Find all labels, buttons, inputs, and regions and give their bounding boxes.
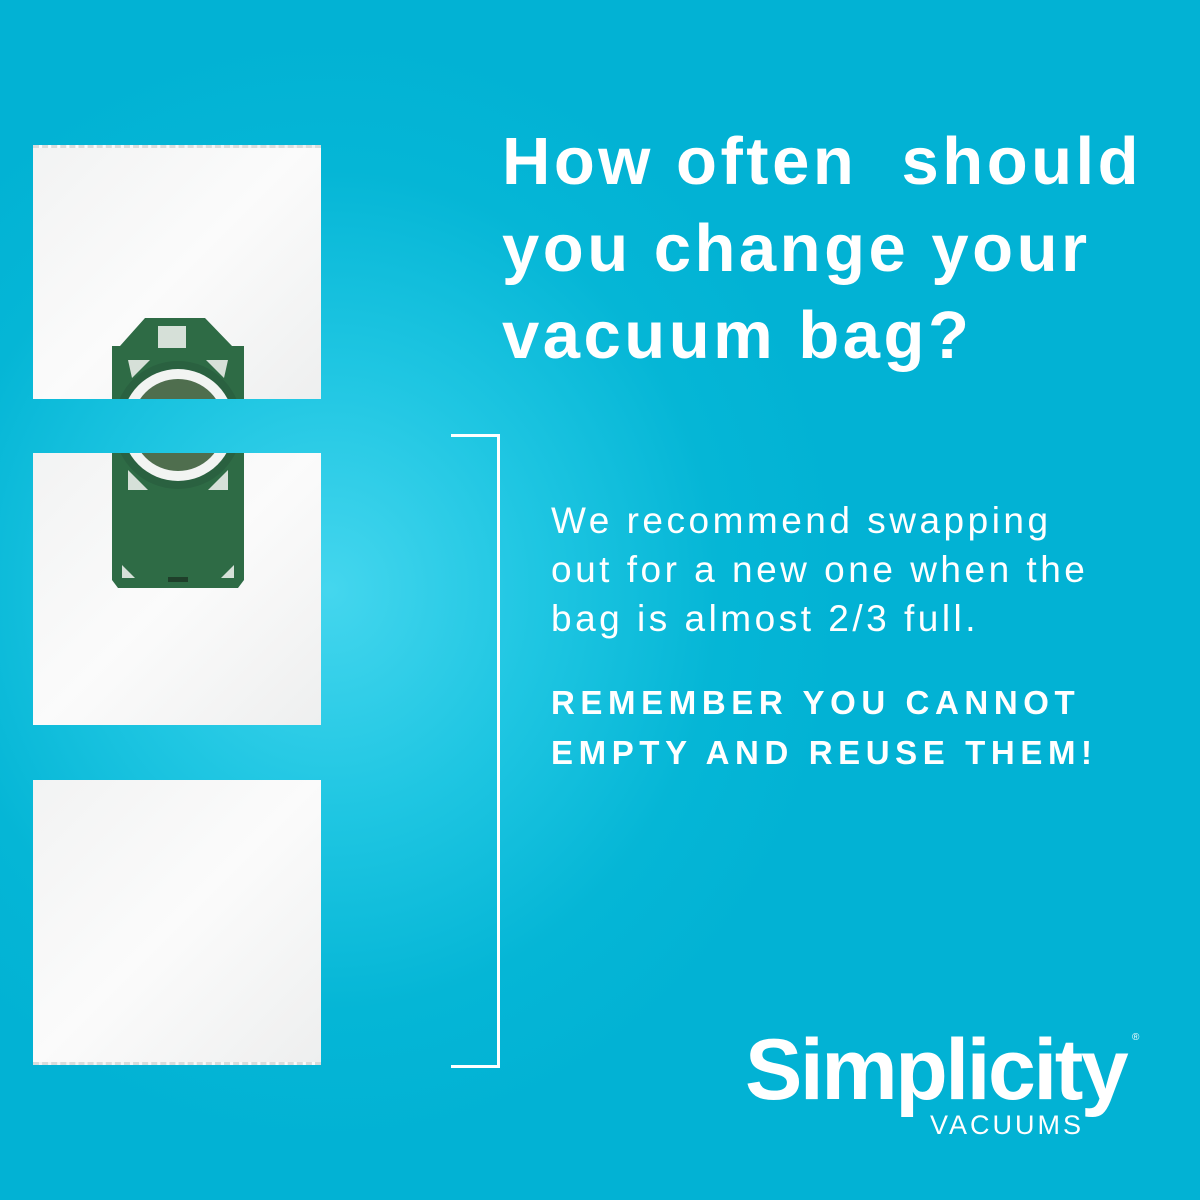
body text: out for a new one when the (551, 549, 1088, 590)
body text: We recommend swapping (551, 500, 1052, 541)
bracket (451, 434, 500, 1068)
title (502, 124, 1142, 373)
callout: reminder: EMPTY AND REUSE THEM! (551, 734, 1098, 771)
callout: reminder: REMEMBER YOU CANNOT (551, 684, 1080, 721)
bag piece: top (33, 145, 321, 399)
icon: green bag collar (112, 318, 244, 588)
callout: reminder (551, 684, 1098, 771)
title: you change your (502, 211, 1091, 286)
body text: bag is almost 2/3 full. (551, 598, 979, 639)
bag piece: middle (33, 453, 321, 725)
logo: Simplicity (745, 1022, 1126, 1118)
title: How often should (502, 124, 1142, 199)
logo: VACUUMS (930, 1110, 1084, 1140)
body text (551, 500, 1088, 639)
logo: ® (1132, 1032, 1139, 1043)
title: vacuum bag? (502, 298, 972, 373)
bag piece: bottom (33, 780, 321, 1065)
